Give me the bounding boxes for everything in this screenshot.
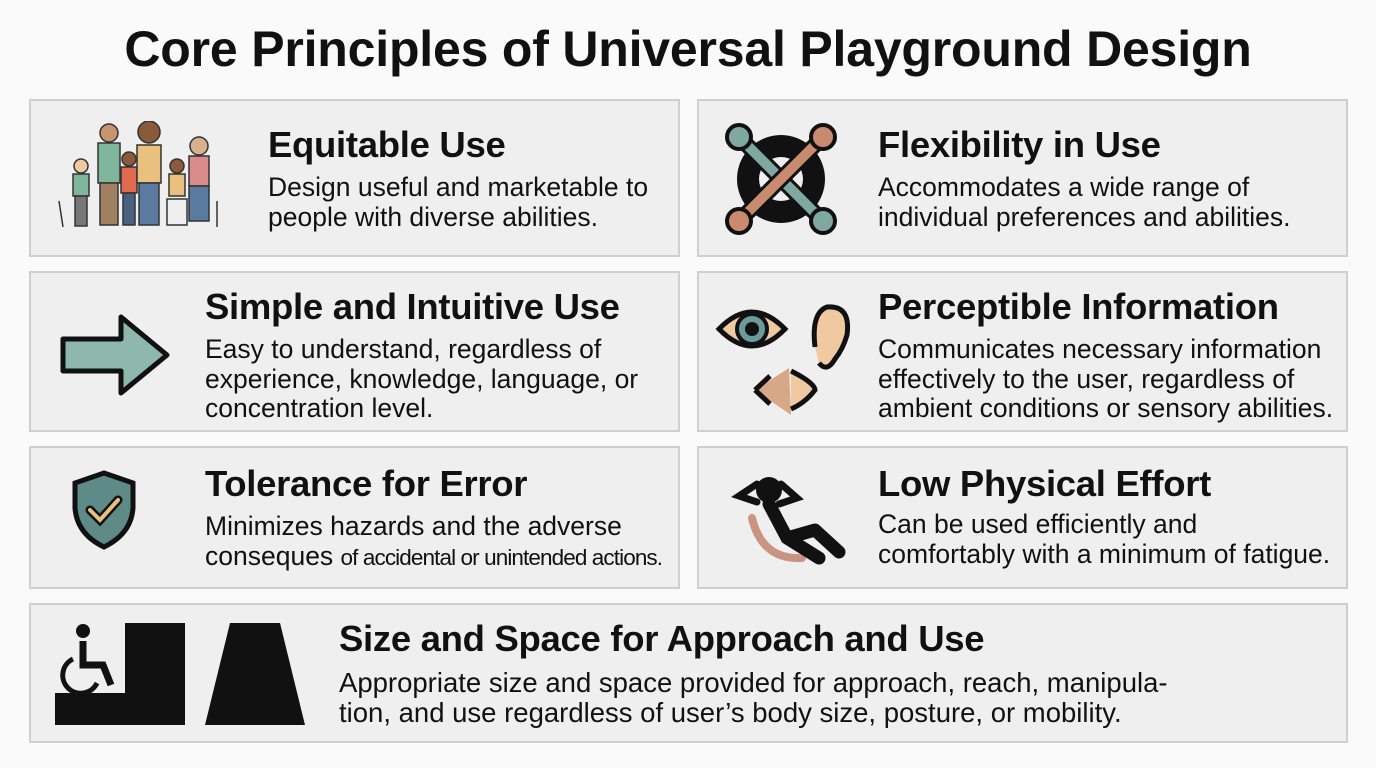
panel: equitable use: [29, 99, 680, 257]
text: [878, 334, 1333, 423]
text: concentration level.: [205, 393, 433, 423]
text: [878, 172, 1290, 232]
text: comfortably with a minimum of fatigue.: [878, 538, 1330, 568]
text: [205, 334, 638, 423]
text: effectively to the user, regardless of: [878, 364, 1294, 394]
text: ambient conditions or sensory abilities.: [878, 393, 1333, 423]
panel: size and space: [29, 603, 1348, 743]
text: Appropriate size and space provided for approach, reach, manipula-: [339, 667, 1168, 698]
text: Design useful and marketable to: [268, 172, 648, 202]
text: [205, 511, 662, 570]
panel: low physical effort: [697, 446, 1348, 589]
icon: arrow: [60, 314, 170, 396]
text: [268, 172, 648, 232]
text: Minimizes hazards and the adverse: [205, 511, 622, 541]
icon: diverse people: [58, 121, 218, 228]
text: Accommodates a wide range of: [878, 172, 1249, 202]
text: Can be used efficiently and: [878, 509, 1197, 539]
heading: Perceptible Information: [878, 286, 1279, 327]
text: individual preferences and abilities.: [878, 202, 1290, 232]
heading: Tolerance for Error: [205, 463, 527, 504]
panel: tolerance for error: [29, 446, 680, 589]
heading: Simple and Intuitive Use: [205, 286, 620, 327]
panel: perceptible information: [697, 271, 1348, 432]
panel: simple and intuitive use: [29, 271, 680, 432]
text: conseques of accidental or unintended actions.: [205, 540, 662, 570]
heading: Flexibility in Use: [878, 124, 1161, 165]
heading: Equitable Use: [268, 124, 505, 165]
text: tion, and use regardless of user’s body size, posture, or mobility.: [339, 696, 1122, 728]
icon: shield check: [72, 470, 136, 550]
icon: wrench and gear: [725, 123, 837, 235]
text: experience, knowledge, language, or: [205, 364, 638, 394]
icon: senses: [716, 304, 850, 415]
text: Communicates necessary information: [878, 334, 1321, 364]
icon: reclining person: [731, 477, 846, 564]
text: people with diverse abilities.: [268, 202, 598, 232]
text: [339, 667, 1168, 728]
heading: Size and Space for Approach and Use: [339, 618, 984, 659]
icon: wheelchair ramp: [55, 623, 305, 725]
text: Easy to understand, regardless of: [205, 334, 601, 364]
panel: flexibility in use: [697, 99, 1348, 257]
text: [878, 509, 1330, 568]
title: Core Principles of Universal Playground Design: [124, 21, 1252, 77]
heading: Low Physical Effort: [878, 463, 1211, 504]
